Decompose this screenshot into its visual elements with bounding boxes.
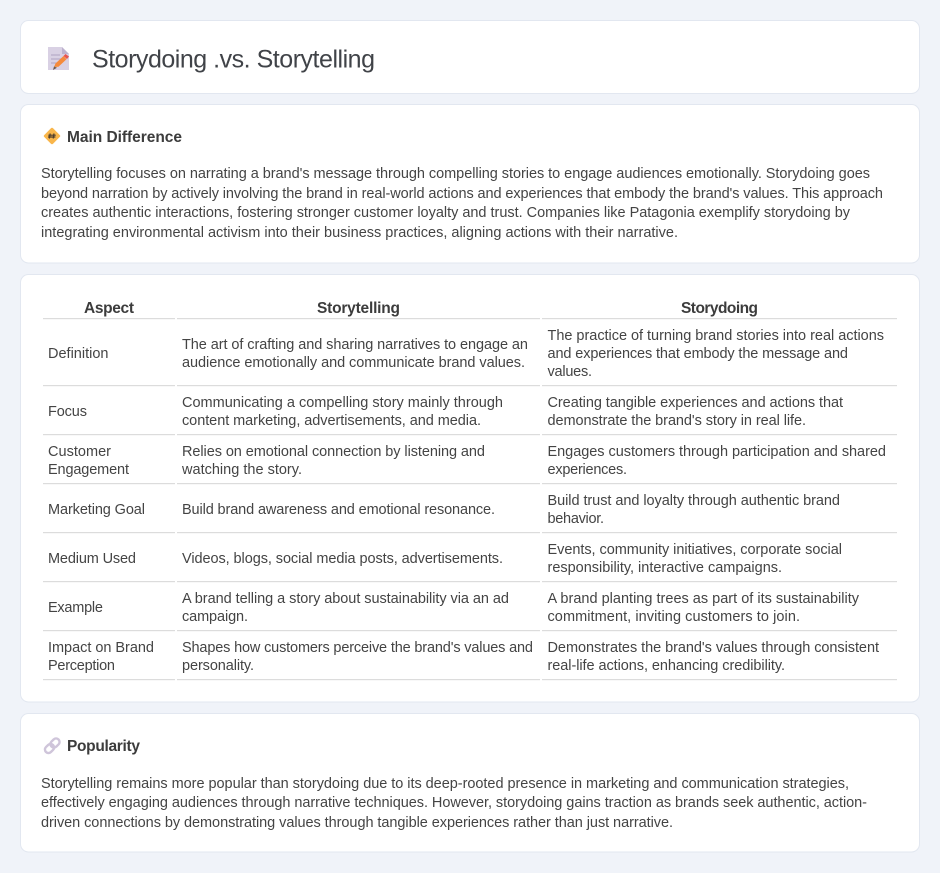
row: definition: Definition	[48, 346, 108, 362]
icon: diamond sign	[43, 127, 61, 145]
row: customer engagement	[43, 444, 897, 484]
row: customer engagement: experiences.	[548, 462, 627, 478]
text block: main difference body: beyond narration by actively involving the brand in real-world actions and experiences that embody the brand's values. This approach	[41, 186, 883, 202]
row: example: campaign.	[182, 609, 248, 625]
row: impact on brand perception: Demonstrates the brand's values through consistent	[548, 640, 879, 656]
icon: chain link	[43, 737, 61, 755]
text block: main difference body: integrating environmental activism into their business practices, aligning actions with their narrative.	[41, 225, 678, 241]
row: impact on brand perception	[43, 640, 897, 680]
row: definition: values.	[548, 364, 592, 380]
row: customer engagement: watching the story.	[181, 462, 302, 478]
row: example: A brand planting trees as part of its sustainability	[548, 591, 860, 607]
text block: popularity body: Storytelling remains more popular than storydoing due to its deep-rooted presence in marketing and communication strategies,	[41, 776, 849, 792]
row: marketing goal: Marketing Goal	[48, 502, 145, 518]
row: focus: demonstrate the brand's story in real life.	[548, 413, 806, 429]
row: impact on brand perception: Perception	[48, 658, 115, 674]
row: example: commitment, inviting customers to join.	[548, 609, 800, 625]
table header row: Storydoing	[681, 300, 758, 317]
row: example: Example	[48, 600, 103, 616]
row: focus: Communicating a compelling story mainly through	[182, 395, 503, 411]
row: focus: Creating tangible experiences and actions that	[548, 395, 843, 411]
panel: comparison table	[20, 274, 920, 702]
text block: main difference body: creates authentic interactions, fostering stronger customer loyalty and trust. Companies like Patagonia exemplify storydoing by	[41, 205, 851, 221]
row: medium used: Events, community initiatives, corporate social	[548, 542, 842, 558]
row: example: A brand telling a story about sustainability via an ad	[182, 591, 509, 607]
row: customer engagement: Relies on emotional connection by listening and	[182, 444, 485, 460]
row: impact on brand perception: personality.	[182, 658, 254, 674]
row: focus	[43, 395, 897, 435]
row: medium used: Videos, blogs, social media posts, advertisements.	[182, 551, 503, 567]
row: focus: Focus	[48, 404, 87, 420]
text block: popularity body	[41, 776, 867, 831]
row: marketing goal	[43, 493, 897, 533]
table header row: Aspect	[84, 300, 134, 317]
row: customer engagement: Customer	[48, 444, 111, 460]
row: definition	[43, 328, 897, 386]
row: medium used: Medium Used	[48, 551, 136, 567]
row: marketing goal: behavior.	[548, 511, 604, 527]
row: definition: audience emotionally and communicate brand values.	[182, 355, 525, 371]
row: example	[43, 591, 897, 631]
text block: popularity body: effectively engaging audiences through narrative techniques. However, storydoing gains traction as brands seek authentic, action-	[41, 795, 867, 811]
title: Storydoing .vs. Storytelling	[92, 46, 375, 74]
text block: main difference body	[41, 166, 883, 241]
row: definition: The art of crafting and sharing narratives to engage an	[182, 337, 528, 353]
panel: title header	[20, 20, 920, 94]
icon: document with pencil	[48, 47, 69, 70]
row: medium used	[43, 542, 897, 582]
text block: main difference body: Storytelling focuses on narrating a brand's message through compelling stories to engage audiences emotionally. Storydoing goes	[41, 166, 870, 182]
row: impact on brand perception: real-life actions, enhancing credibility.	[548, 658, 785, 674]
row: medium used: responsibility, interactive campaigns.	[548, 560, 782, 576]
row: marketing goal: Build brand awareness and emotional resonance.	[182, 502, 495, 518]
heading: main difference: Main Difference	[67, 129, 182, 146]
row: focus: content marketing, advertisements, and media.	[182, 413, 481, 429]
table header row: Storytelling	[317, 300, 400, 317]
panel: popularity	[20, 714, 920, 852]
row: customer engagement: Engages customers through participation and shared	[548, 444, 886, 460]
heading: popularity: Popularity	[67, 738, 140, 755]
row: definition: The practice of turning brand stories into real actions	[548, 328, 884, 344]
row: impact on brand perception: Impact on Brand	[48, 640, 154, 656]
row: definition: and experiences that embody the message and	[548, 346, 848, 362]
text block: popularity body: driven connections by demonstrating values through tangible experiences rather than just narrative.	[41, 815, 673, 831]
panel: main difference	[20, 104, 920, 263]
table header row	[43, 300, 897, 319]
row: marketing goal: Build trust and loyalty through authentic brand	[548, 493, 840, 509]
row: impact on brand perception: Shapes how customers perceive the brand's values and	[182, 640, 533, 656]
row: customer engagement: Engagement	[48, 462, 129, 478]
